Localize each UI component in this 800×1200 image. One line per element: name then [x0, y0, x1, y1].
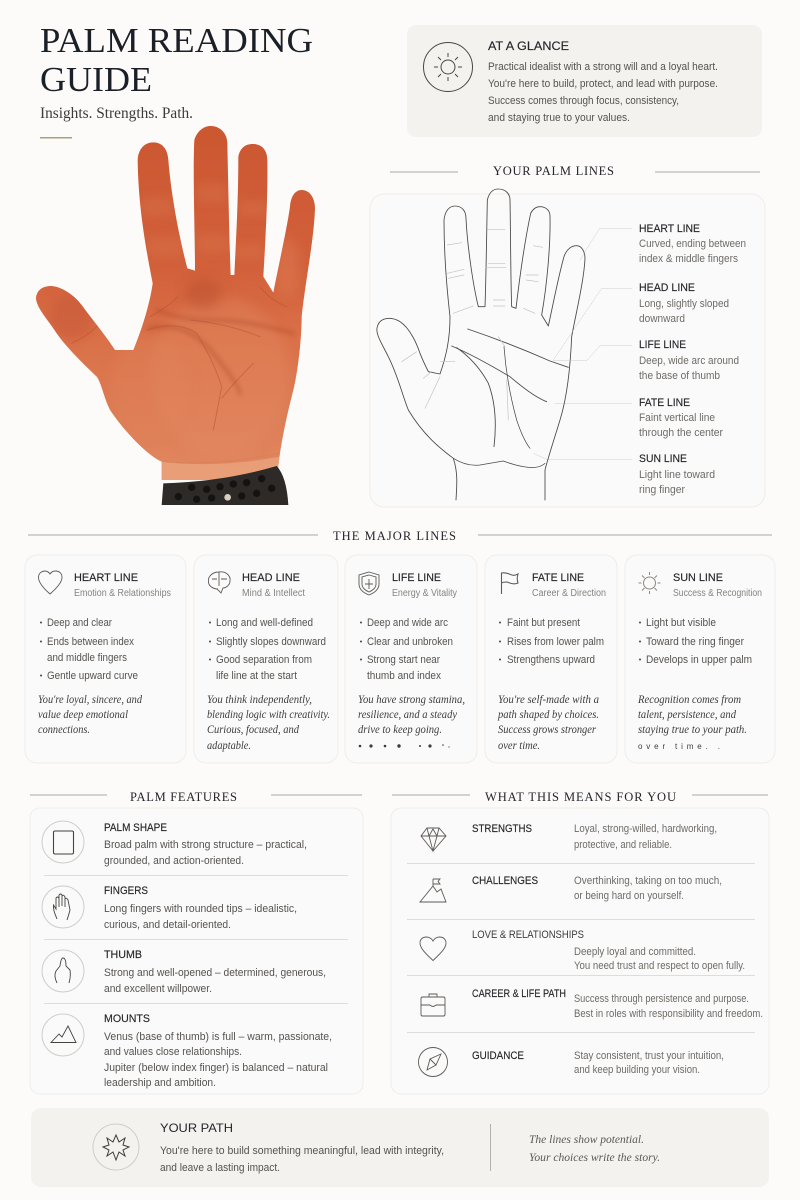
- icon: compass: [418, 1048, 448, 1076]
- feature: mounts: MOUNTS: [104, 1013, 150, 1025]
- bullets: Deep and wide arc: [367, 617, 448, 629]
- hand photo illustration: [30, 120, 323, 505]
- watch band: [162, 466, 288, 505]
- your path text: and leave a lasting impact.: [160, 1162, 280, 1174]
- subtitle: Insights. Strengths. Path.: [40, 105, 193, 122]
- love and relationships: You need trust and respect to open fully.: [574, 960, 745, 972]
- interpretation: adaptable.: [207, 738, 251, 752]
- heading: your palm lines: YOUR PALM LINES: [493, 164, 614, 178]
- interpretation: [497, 692, 599, 752]
- icon: shield: [359, 572, 379, 595]
- closing quote: [529, 1132, 660, 1164]
- label: heart line: index & middle fingers: [639, 253, 738, 265]
- card: fate line: [485, 555, 617, 763]
- interpretation: You think independently,: [207, 692, 312, 706]
- love and relationships: LOVE & RELATIONSHIPS: [472, 929, 584, 941]
- closing quote: Your choices write the story.: [529, 1150, 660, 1164]
- interpretation: drive to keep going.: [358, 722, 442, 736]
- challenges: [472, 875, 722, 902]
- interpretation: resilience, and a steady: [358, 707, 458, 721]
- label: heart line: Curved, ending between: [639, 238, 746, 250]
- bullets: Develops in upper palm: [646, 654, 752, 666]
- label: life line: the base of thumb: [639, 370, 720, 382]
- interpretation: path shaped by choices.: [497, 707, 599, 721]
- feature: thumb: Strong and well-opened – determined, generous,: [104, 967, 326, 979]
- at a glance text: You're here to build, protect, and lead with purpose.: [488, 78, 718, 90]
- panel: your path: [31, 1108, 769, 1187]
- icon: diamond: [421, 828, 446, 851]
- bullets: Rises from lower palm: [507, 636, 604, 648]
- guidance: and keep building your vision.: [574, 1064, 700, 1076]
- feature: mounts: and values close relationships.: [104, 1046, 242, 1058]
- feature: palm shape: [104, 822, 307, 867]
- strengths: protective, and reliable.: [574, 839, 672, 851]
- card: heart line: HEART LINE: [74, 572, 138, 584]
- feature: fingers: FINGERS: [104, 885, 148, 897]
- bullets: [499, 617, 604, 666]
- leader lines: [533, 229, 632, 459]
- bullets: Light but visible: [646, 617, 716, 629]
- label: fate line: [639, 397, 723, 439]
- label: sun line: ring finger: [639, 484, 685, 496]
- interpretation: Curious, focused, and: [207, 722, 300, 736]
- bullets: [360, 617, 453, 682]
- bullets: Good separation from: [216, 654, 312, 666]
- bullets: life line at the start: [216, 670, 297, 682]
- card: life line: LIFE LINE: [392, 572, 441, 584]
- label: head line: downward: [639, 313, 685, 325]
- card: fate line: Career & Direction: [532, 588, 606, 599]
- interpretation: Recognition comes from: [637, 692, 741, 706]
- card: life line: Energy & Vitality: [392, 588, 457, 599]
- label: sun line: [639, 453, 715, 496]
- label: head line: [639, 282, 729, 325]
- heading: what this means for you: WHAT THIS MEANS FOR YOU: [485, 790, 676, 804]
- title: GUIDE: [40, 60, 152, 99]
- feature: mounts: Venus (base of thumb) is full – warm, passionate,: [104, 1031, 332, 1043]
- your path heading: YOUR PATH: [160, 1121, 233, 1135]
- interpretation: over time. .: [638, 742, 720, 751]
- challenges: Overthinking, taking on too much,: [574, 875, 722, 887]
- feature: mounts: leadership and ambition.: [104, 1077, 216, 1089]
- feature: mounts: [104, 1013, 332, 1089]
- interpretation: talent, persistence, and: [638, 707, 737, 721]
- bullets: [209, 617, 326, 682]
- bullets: Clear and unbroken: [367, 636, 453, 648]
- feature: mounts: Jupiter (below index finger) is balanced – natural: [104, 1062, 328, 1074]
- interpretation: value deep emotional: [38, 707, 129, 721]
- feature: fingers: Long fingers with rounded tips – idealistic,: [104, 903, 297, 915]
- at a glance text: and staying true to your values.: [488, 112, 630, 124]
- label: heart line: HEART LINE: [639, 223, 700, 235]
- career and life path: [472, 988, 763, 1020]
- label: head line: HEAD LINE: [639, 282, 695, 294]
- card: head line: [194, 555, 338, 763]
- feature: palm shape: PALM SHAPE: [104, 822, 167, 834]
- interpretation: Success grows stronger: [498, 722, 596, 736]
- label: head line: Long, slightly sloped: [639, 298, 729, 310]
- card: life line: [345, 555, 477, 763]
- card: heart line: Emotion & Relationships: [74, 588, 171, 599]
- label: fate line: through the center: [639, 427, 723, 439]
- bullets: Strong start near: [367, 654, 440, 666]
- card: sun line: SUN LINE: [673, 572, 723, 584]
- strengths: [472, 823, 717, 851]
- interpretation: over time.: [498, 738, 540, 752]
- card: fate line: FATE LINE: [532, 572, 584, 584]
- at a glance heading: AT A GLANCE: [488, 41, 569, 53]
- bullets: [40, 617, 138, 682]
- strengths: Loyal, strong-willed, hardworking,: [574, 823, 717, 835]
- interpretation: You're loyal, sincere, and: [38, 692, 143, 706]
- career and life path: Best in roles with responsibility and freedom.: [574, 1008, 763, 1020]
- icon: briefcase: [421, 994, 445, 1016]
- card: sun line: Success & Recognition: [673, 588, 762, 599]
- label: life line: Deep, wide arc around: [639, 355, 739, 367]
- title: [40, 21, 313, 99]
- bullets: Ends between index: [47, 636, 134, 648]
- at a glance text: Success comes through focus, consistency,: [488, 95, 679, 107]
- card: head line: Mind & Intellect: [242, 588, 305, 599]
- title: PALM READING: [40, 21, 313, 60]
- feature: fingers: curious, and detail-oriented.: [104, 919, 231, 931]
- closing quote: The lines show potential.: [529, 1132, 644, 1146]
- interpretation: You're self-made with a: [498, 692, 599, 706]
- card: sun line: [625, 555, 775, 763]
- interpretation: [38, 692, 143, 736]
- at a glance text: Practical idealist with a strong will and a loyal heart.: [488, 61, 718, 73]
- love and relationships: Deeply loyal and committed.: [574, 946, 696, 958]
- your path text: You're here to build something meaningful, lead with integrity,: [160, 1145, 444, 1157]
- feature: palm shape: Broad palm with strong structure – practical,: [104, 839, 307, 851]
- panel: what this means for you: [391, 808, 769, 1094]
- heading: palm features: PALM FEATURES: [130, 790, 237, 804]
- icon: brain: [208, 572, 230, 593]
- label: heart line: [639, 223, 746, 265]
- gold accent rule: [40, 137, 72, 138]
- card: head line: HEAD LINE: [242, 572, 300, 584]
- icon: heart: [420, 937, 446, 960]
- label: fate line: FATE LINE: [639, 397, 690, 409]
- bullets: Long and well-defined: [216, 617, 313, 629]
- label: sun line: SUN LINE: [639, 453, 687, 465]
- feature: thumb: [104, 949, 326, 995]
- label: sun line: Light line toward: [639, 469, 715, 481]
- panel: at a glance: [407, 25, 762, 137]
- icon: mounts: [42, 1014, 84, 1056]
- label: life line: [639, 339, 739, 382]
- icon: star in circle: [93, 1124, 139, 1170]
- at a glance text: [488, 61, 718, 124]
- career and life path: Success through persistence and purpose.: [574, 993, 749, 1005]
- label: fate line: Faint vertical line: [639, 412, 715, 424]
- icon: sun: [638, 572, 660, 594]
- icon: sun in circle: [424, 42, 472, 92]
- icon: flag: [502, 573, 518, 594]
- label: life line: LIFE LINE: [639, 339, 686, 351]
- palm line drawing: [377, 189, 632, 500]
- bullets: Faint but present: [507, 617, 580, 629]
- bullets: Slightly slopes downward: [216, 636, 326, 648]
- interpretation: blending logic with creativity.: [207, 707, 330, 721]
- strengths: STRENGTHS: [472, 823, 532, 835]
- bullets: Strengthens upward: [507, 654, 595, 666]
- interpretation: [358, 692, 465, 748]
- icon: mountain with flag: [420, 879, 446, 902]
- bullets: thumb and index: [367, 670, 441, 682]
- bullets: Gentle upward curve: [47, 670, 138, 682]
- panel: palm features: [30, 808, 363, 1094]
- interpretation: [207, 692, 330, 752]
- feature: thumb: THUMB: [104, 949, 142, 961]
- guidance: GUIDANCE: [472, 1050, 524, 1062]
- icon: thumb: [42, 950, 84, 992]
- icon: fingers: [42, 886, 84, 928]
- feature: fingers: [104, 885, 297, 931]
- guidance: Stay consistent, trust your intuition,: [574, 1050, 724, 1062]
- interpretation: staying true to your path.: [638, 722, 747, 736]
- love and relationships: [472, 929, 745, 972]
- bullets: [639, 617, 752, 666]
- card: heart line: [25, 555, 186, 763]
- heading: the major lines: THE MAJOR LINES: [333, 529, 456, 543]
- interpretation: You have strong stamina,: [358, 692, 465, 706]
- icon: heart: [38, 571, 62, 594]
- guidance: [472, 1050, 724, 1076]
- bullets: and middle fingers: [47, 652, 127, 664]
- bullets: Deep and clear: [47, 617, 112, 629]
- career and life path: CAREER & LIFE PATH: [472, 988, 566, 1000]
- bullets: Toward the ring finger: [646, 636, 744, 648]
- icon: palm shape: [42, 821, 84, 863]
- panel: your palm lines: [370, 189, 765, 507]
- interpretation: connections.: [38, 722, 90, 736]
- your path text: [160, 1145, 444, 1174]
- feature: palm shape: grounded, and action-oriented.: [104, 855, 244, 867]
- interpretation: [637, 692, 747, 751]
- challenges: CHALLENGES: [472, 875, 538, 887]
- challenges: or being hard on yourself.: [574, 890, 684, 902]
- feature: thumb: and excellent willpower.: [104, 983, 212, 995]
